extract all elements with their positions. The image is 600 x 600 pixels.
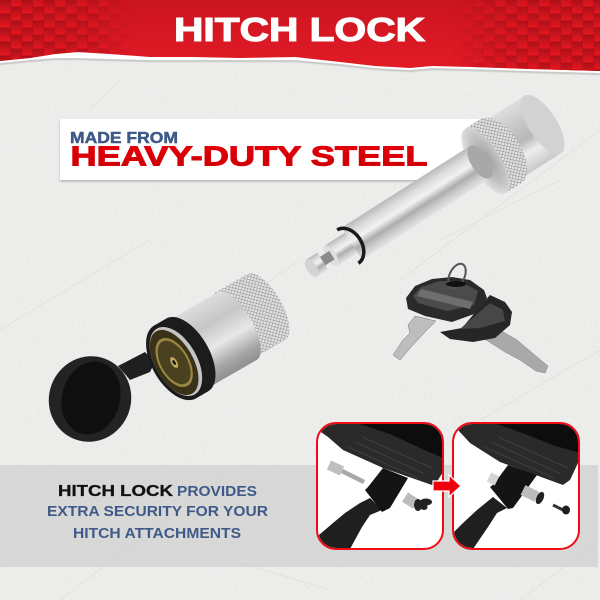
tip cylinders (325, 233, 358, 266)
caption line 1 blue: PROVIDES (177, 484, 257, 500)
panel: hitch after (453, 423, 579, 549)
banner heading: HEAVY-DUTY STEEL (70, 140, 428, 172)
icon: hitch pin (289, 85, 575, 305)
panel: heavy-duty steel banner (60, 119, 480, 182)
caption line 3: HITCH ATTACHMENTS (73, 526, 241, 542)
icon: keys (393, 261, 548, 373)
removed key (553, 505, 570, 514)
header band (0, 0, 600, 80)
end cap cylinder (484, 96, 561, 179)
cap strap (118, 352, 155, 380)
knurled end (214, 274, 285, 359)
panel: hitch before (317, 423, 443, 549)
black o-ring (337, 222, 370, 263)
right key blade (483, 330, 548, 373)
key ring (445, 261, 469, 291)
small hitch pin (329, 465, 364, 482)
icon: rubber cap (37, 345, 155, 453)
knurled collar (465, 119, 521, 193)
back key head (440, 295, 512, 342)
silver barrel (166, 292, 257, 390)
arrow (433, 475, 461, 497)
black ring (154, 308, 227, 398)
title: HITCH LOCK (174, 11, 425, 48)
caption line 2: EXTRA SECURITY FOR YOUR (47, 504, 269, 520)
caption text (47, 483, 269, 542)
front key head (406, 277, 487, 322)
small lock and keys (405, 497, 432, 511)
installed lock (523, 490, 546, 505)
icon: lock body (134, 265, 302, 410)
face and brass core (139, 318, 213, 405)
left key blade (393, 316, 436, 360)
grey caption band (0, 465, 598, 567)
caption line 1 black: HITCH LOCK (58, 483, 174, 500)
shaft (342, 146, 490, 260)
banner subheading: MADE FROM (70, 130, 178, 147)
installed pin head (489, 477, 497, 481)
